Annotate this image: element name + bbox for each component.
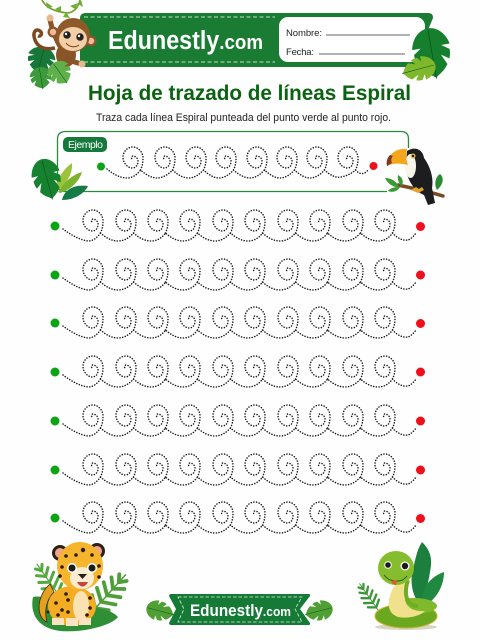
icon: monkey with leaves <box>24 0 97 91</box>
dotted spiral <box>63 307 416 338</box>
start dot <box>50 222 60 230</box>
footer logo: Edunestly.com <box>190 602 291 620</box>
brand logo: Edunestly.com <box>108 27 263 55</box>
row 4 trace <box>50 356 425 387</box>
dotted spiral <box>63 356 416 387</box>
name and date box <box>279 17 425 62</box>
row 7 trace <box>50 502 425 533</box>
dotted spiral <box>63 405 416 436</box>
end dot <box>416 319 425 328</box>
end dot <box>416 514 425 523</box>
end dot <box>416 466 425 474</box>
instructions: Traza cada línea Espiral punteada del punto verde al punto rojo. <box>96 112 391 124</box>
example trace line <box>107 147 368 178</box>
panel: example <box>58 132 408 192</box>
example start dot <box>97 162 105 170</box>
footer badge <box>144 594 335 625</box>
example badge: Ejemplo <box>68 139 103 151</box>
end dot <box>416 416 425 426</box>
ribbon stitching <box>178 597 302 622</box>
end dot <box>416 368 425 376</box>
name and date box: Fecha: <box>286 47 314 58</box>
icon: jaguar cub <box>29 542 135 631</box>
start dot <box>50 318 60 328</box>
icon: footer left leaf <box>144 598 177 624</box>
end dot <box>416 270 425 280</box>
header banner <box>80 13 433 67</box>
dotted spiral <box>63 454 416 485</box>
icon: green snake <box>354 542 444 630</box>
example badge <box>63 137 107 152</box>
dotted spiral <box>63 502 416 533</box>
footer ribbon <box>169 594 310 625</box>
icon: example box leaves <box>28 156 88 203</box>
icon: top right monstera leaves <box>399 25 455 85</box>
icon: footer right leaf <box>302 598 335 624</box>
title: Hoja de trazado de líneas Espiral <box>88 81 411 105</box>
example end dot <box>370 162 378 170</box>
start dot <box>50 466 60 474</box>
dotted spiral <box>63 210 416 241</box>
icon: toucan on branch <box>385 149 443 205</box>
row 2 trace <box>50 259 425 290</box>
start dot <box>50 368 60 376</box>
dotted spiral <box>63 259 416 290</box>
start dot <box>50 416 60 426</box>
name and date box: Nombre: <box>286 28 322 39</box>
start dot <box>50 514 60 522</box>
row 6 trace <box>50 454 425 485</box>
row 5 trace <box>50 405 425 436</box>
row 3 trace <box>50 307 425 338</box>
start dot <box>50 270 60 280</box>
end dot <box>416 222 425 231</box>
row 1 trace <box>50 210 425 241</box>
